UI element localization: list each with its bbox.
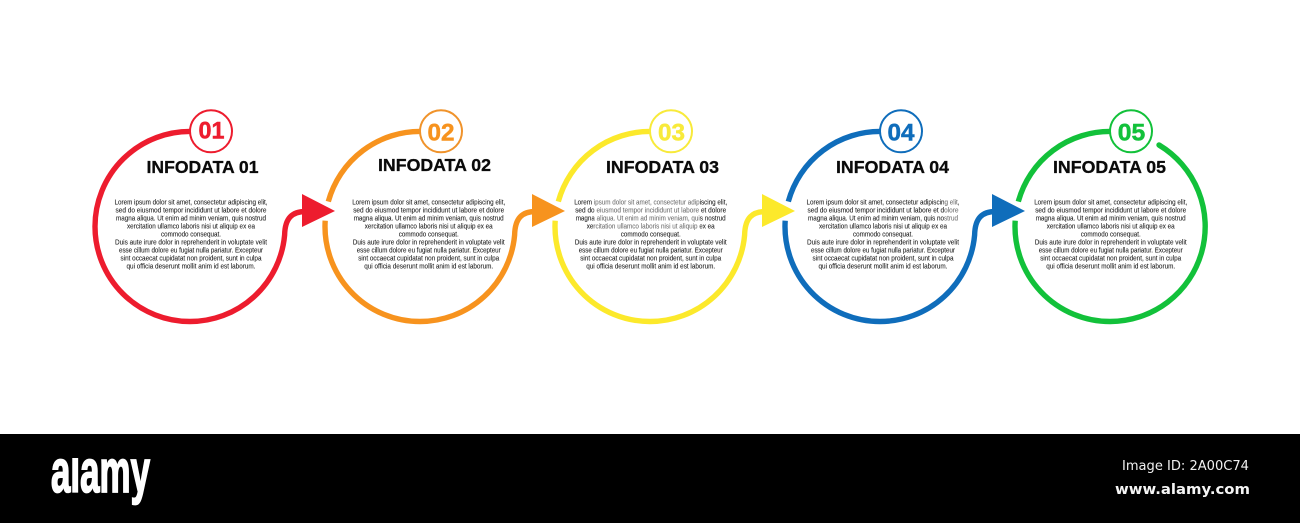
website url: www.alamy.com <box>1115 482 1250 498</box>
upper arc: green <box>1018 131 1112 202</box>
body text 02: sint occaecat cupidatat non proident, sunt in culpa <box>358 254 500 263</box>
heading: infodata 04: INFODATA 04 <box>836 157 949 177</box>
circular arrow path: blue <box>785 212 996 322</box>
body text 03: magna aliqua. Ut enim ad minim veniam, quis nostrud <box>576 213 726 222</box>
body text 01: sed do eiusmod tempor incididunt ut labore et dolore <box>116 205 266 214</box>
body text 01: commodo consequat. <box>161 230 221 238</box>
body text 03: commodo consequat. <box>621 230 681 238</box>
body text 05 <box>1034 197 1187 271</box>
heading: infodata 05: INFODATA 05 <box>1053 157 1166 177</box>
body text 02: xercitation ullamco laboris nisi ut aliquip ex ea <box>365 222 493 230</box>
body text 02: commodo consequat. <box>399 230 459 238</box>
body text 01 <box>114 197 268 271</box>
panel: step 05 <box>1015 110 1205 322</box>
body text 05: Duis aute irure dolor in reprehenderit in voluptate velit <box>1035 238 1187 246</box>
body text 01: Duis aute irure dolor in reprehenderit in voluptate velit <box>115 238 267 246</box>
circular arrow path: red <box>95 131 306 322</box>
image id: Image ID: 2A00C74 <box>1122 458 1249 474</box>
panel: step 01 <box>95 110 335 322</box>
body text 04: Lorem ipsum dolor sit amet, consectetur adipiscing elit, <box>806 197 960 206</box>
number badge 01: 01 <box>198 118 224 144</box>
body text 03: esse cillum dolore eu fugiat nulla pariatur. Excepteur <box>579 246 723 255</box>
body text 04: sint occaecat cupidatat non proident, sunt in culpa <box>812 254 954 263</box>
number badge 01 <box>190 110 232 152</box>
body text 02: esse cillum dolore eu fugiat nulla pariatur. Excepteur <box>357 246 501 255</box>
body text 04: xercitation ullamco laboris nisi ut aliquip ex ea <box>819 222 948 230</box>
body text 01: magna aliqua. Ut enim ad minim veniam, quis nostrud <box>116 213 266 222</box>
body text 05: xercitation ullamco laboris nisi ut aliquip ex ea <box>1047 222 1175 230</box>
arrowhead: red <box>302 194 335 227</box>
body text 05: esse cillum dolore eu fugiat nulla pariatur. Excepteur <box>1039 246 1183 255</box>
footer bar <box>0 434 1300 523</box>
body text 04 <box>806 197 960 271</box>
body text 05: qui officia deserunt mollit anim id est laborum. <box>1046 262 1175 271</box>
arrowhead: blue <box>992 194 1025 227</box>
number badge 04 <box>880 110 922 152</box>
open circle arc: green <box>1015 142 1205 322</box>
body text 03: Duis aute irure dolor in reprehenderit in voluptate velit <box>575 238 727 246</box>
number badge 02 <box>420 110 462 152</box>
body text 05: commodo consequat. <box>1081 230 1141 238</box>
body text 05: sint occaecat cupidatat non proident, sunt in culpa <box>1040 254 1182 263</box>
upper arc: blue <box>788 131 882 202</box>
arrowhead: yellow <box>762 194 795 227</box>
body text 01: sint occaecat cupidatat non proident, sunt in culpa <box>120 254 262 263</box>
body text 01: qui officia deserunt mollit anim id est laborum. <box>126 262 256 271</box>
body text 02: qui officia deserunt mollit anim id est laborum. <box>364 262 493 271</box>
heading: infodata 02: INFODATA 02 <box>378 155 491 175</box>
body text 04: sed do eiusmod tempor incididunt ut labore et dolore <box>808 205 958 214</box>
body text 04: Duis aute irure dolor in reprehenderit in voluptate velit <box>807 238 959 246</box>
number badge 03 <box>650 110 692 152</box>
number badge 04: 04 <box>888 120 915 147</box>
body text 02: Duis aute irure dolor in reprehenderit in voluptate velit <box>353 238 505 246</box>
body text 05: Lorem ipsum dolor sit amet, consectetur adipiscing elit, <box>1034 197 1187 206</box>
panel: step 02 <box>325 110 565 322</box>
body text 05: magna aliqua. Ut enim ad minim veniam, quis nostrud <box>1036 213 1186 222</box>
body text 03: Lorem ipsum dolor sit amet, consectetur adipiscing elit, <box>574 197 727 206</box>
number badge 05 <box>1110 110 1152 152</box>
body text 01: esse cillum dolore eu fugiat nulla pariatur. Excepteur <box>119 246 263 255</box>
body text 01: Lorem ipsum dolor sit amet, consectetur adipiscing elit, <box>114 197 268 206</box>
panel: step 03 <box>555 110 795 322</box>
number badge 03: 03 <box>658 120 685 147</box>
heading: infodata 01: INFODATA 01 <box>146 157 259 177</box>
body text 03: sint occaecat cupidatat non proident, sunt in culpa <box>580 254 722 263</box>
body text 04: magna aliqua. Ut enim ad minim veniam, quis nostrud <box>808 213 958 222</box>
body text 02 <box>352 197 505 271</box>
alamy logo: alamy <box>51 438 150 505</box>
number badge 02: 02 <box>428 120 454 147</box>
body text 04: commodo consequat. <box>853 230 913 238</box>
body text 04: qui officia deserunt mollit anim id est laborum. <box>818 262 948 271</box>
body text 03: xercitation ullamco laboris nisi ut aliquip ex ea <box>587 222 715 230</box>
upper arc: yellow <box>558 131 652 202</box>
body text 03: qui officia deserunt mollit anim id est laborum. <box>586 262 715 271</box>
body text 02: sed do eiusmod tempor incididunt ut labore et dolore <box>353 205 504 214</box>
circular arrow path: orange <box>325 212 536 322</box>
body text 04: esse cillum dolore eu fugiat nulla pariatur. Excepteur <box>811 246 955 255</box>
circular arrow path: yellow <box>555 212 766 322</box>
body text 02: magna aliqua. Ut enim ad minim veniam, quis nostrud <box>354 213 504 222</box>
upper arc: orange <box>328 131 422 202</box>
body text 02: Lorem ipsum dolor sit amet, consectetur adipiscing elit, <box>352 197 505 206</box>
body text 03 <box>574 197 727 271</box>
body text 05: sed do eiusmod tempor incididunt ut labore et dolore <box>1035 205 1186 214</box>
arrowhead: orange <box>532 194 565 227</box>
body text 03: sed do eiusmod tempor incididunt ut labore et dolore <box>575 205 726 214</box>
body text 01: xercitation ullamco laboris nisi ut aliquip ex ea <box>127 222 256 230</box>
panel: step 04 <box>785 110 1025 322</box>
number badge 05: 05 <box>1118 120 1145 147</box>
heading: infodata 03: INFODATA 03 <box>606 157 719 177</box>
